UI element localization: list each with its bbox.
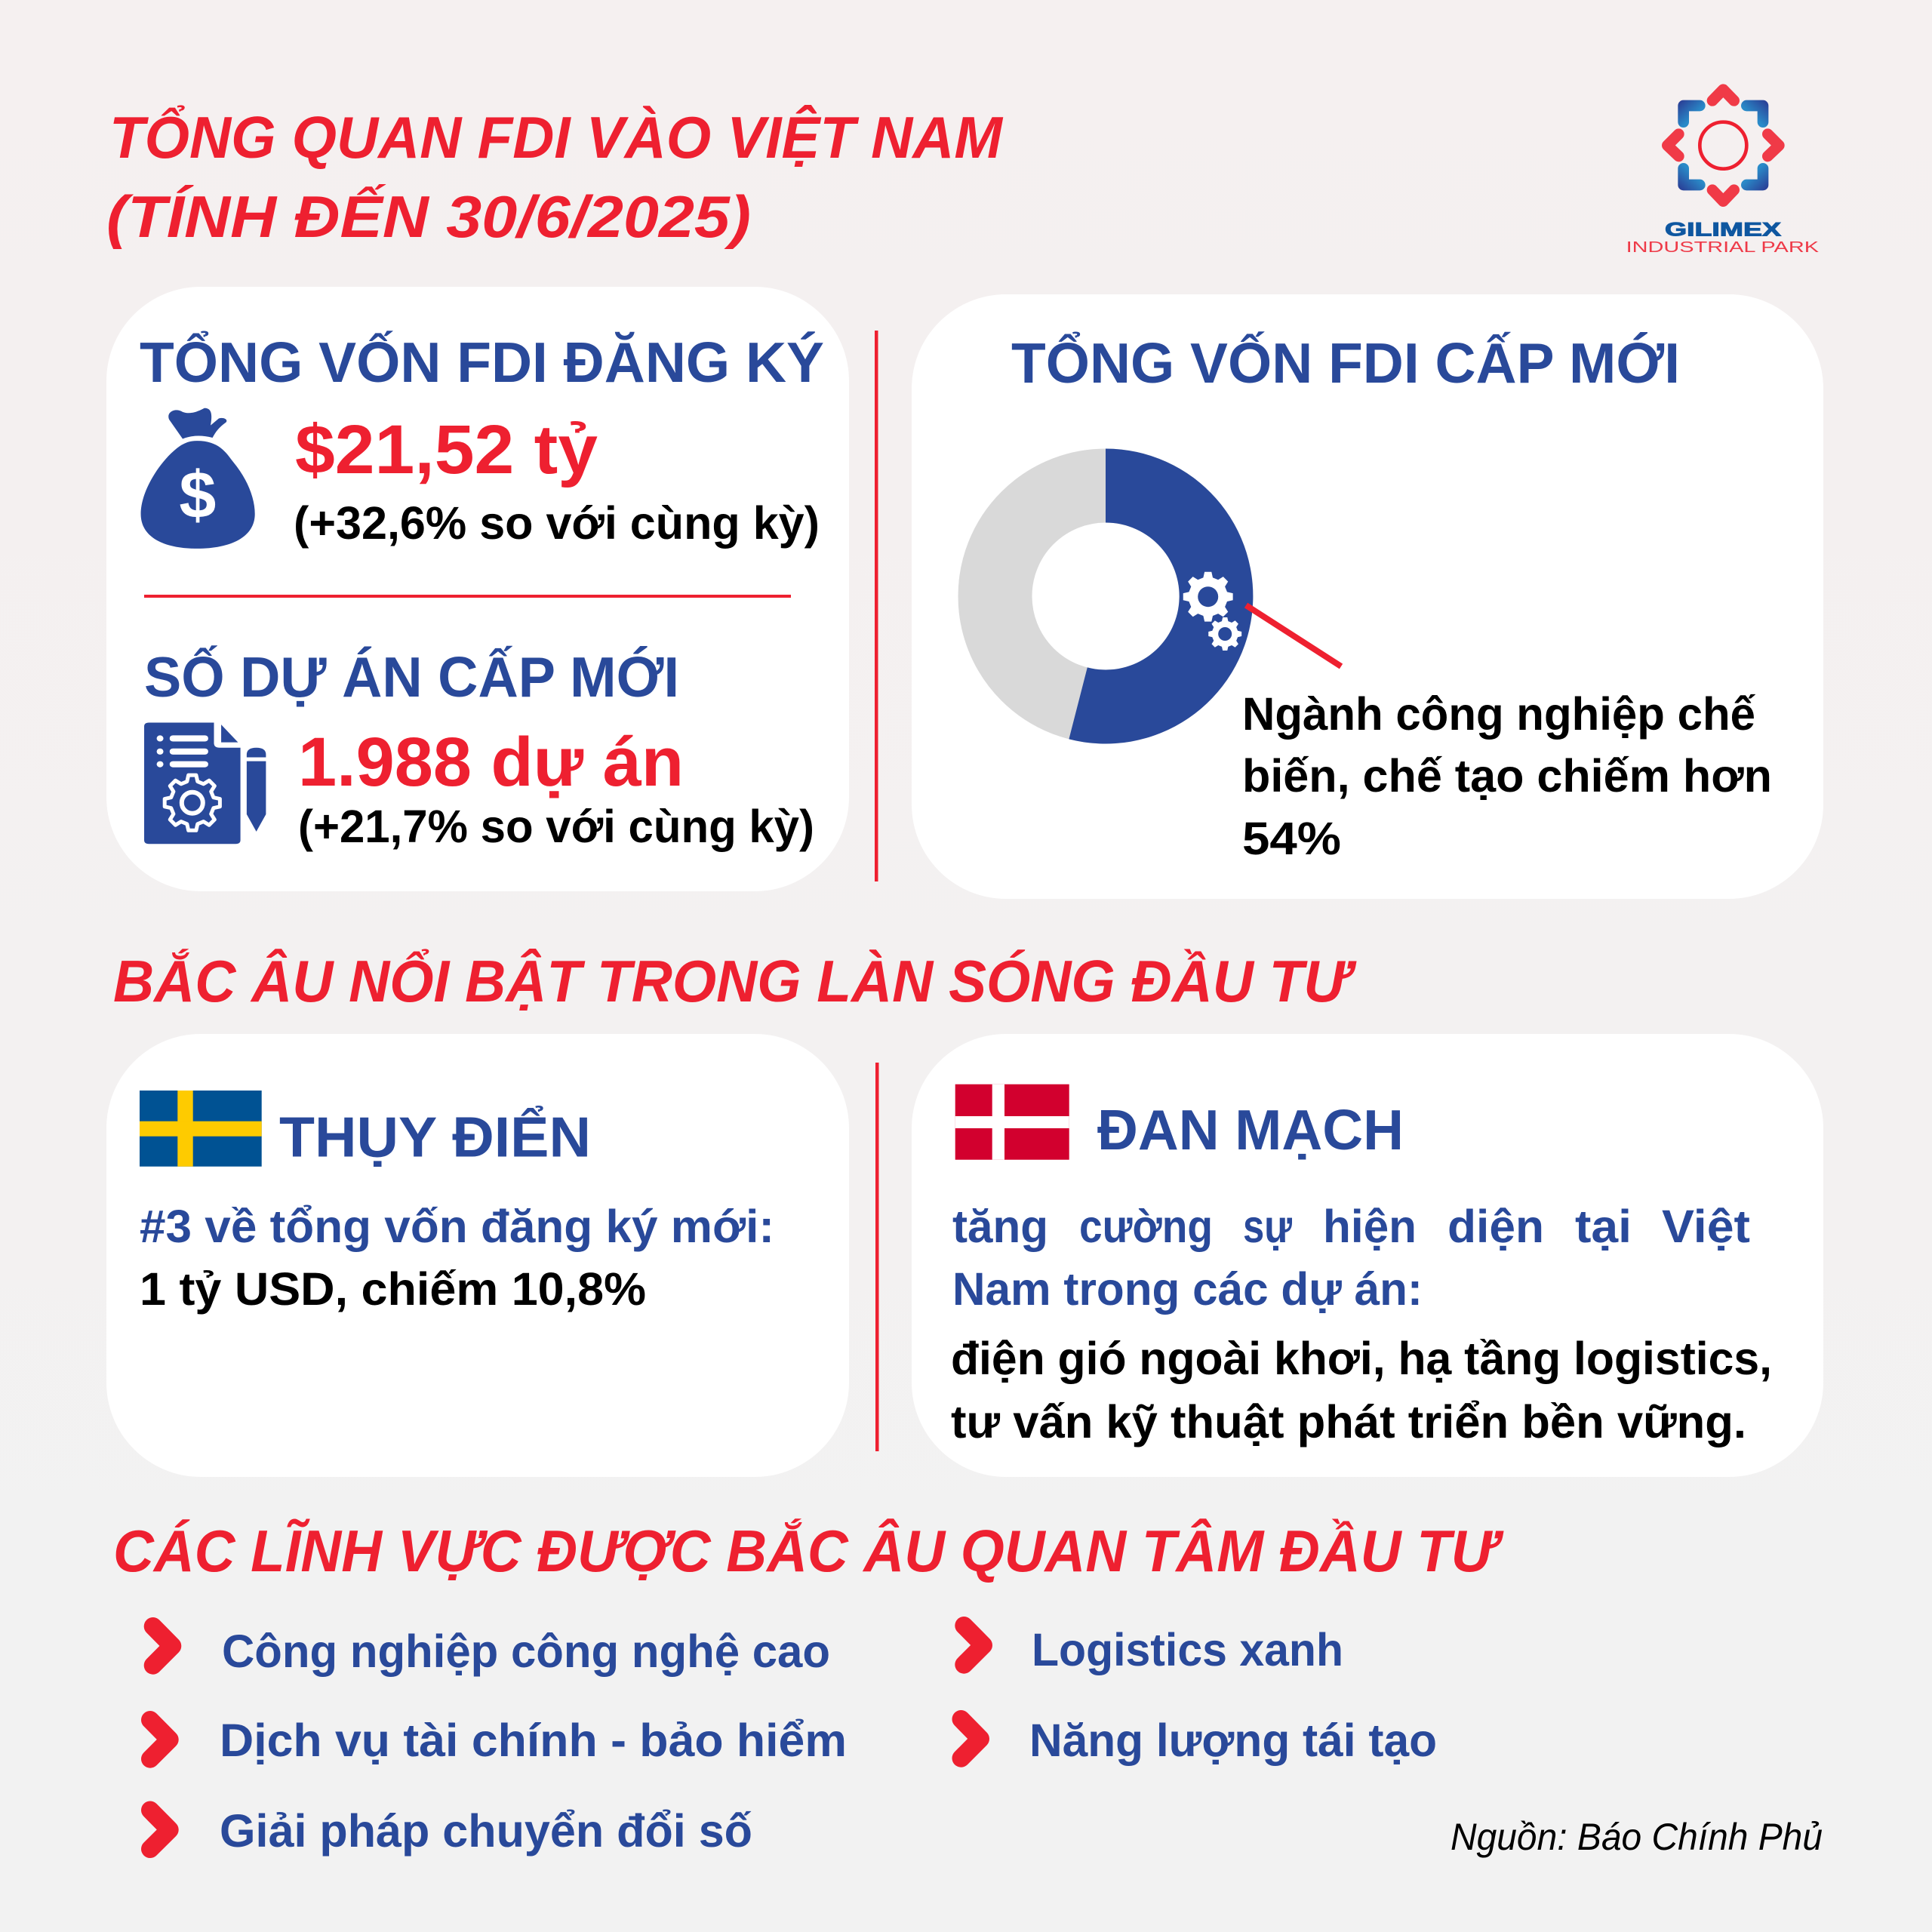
text: manufacturing callout: 54% [1242, 813, 1341, 864]
text: Denmark presence: tại [1575, 1201, 1632, 1252]
text: Denmark projects [951, 1333, 1772, 1447]
heading: sectors of Nordic interest: CÁC LĨNH VỰC ĐƯỢC BẮC ÂU QUAN TÂM ĐẦU TƯ [113, 1518, 1504, 1584]
heading: newly licensed FDI: TỔNG VỐN FDI CẤP MỚI [1011, 331, 1680, 395]
text: manufacturing callout: biến, chế tạo chiếm hơn [1242, 750, 1772, 801]
heading: Sweden: THỤY ĐIỂN [279, 1105, 591, 1168]
callout line [1246, 605, 1341, 666]
panel: Denmark [912, 1034, 1823, 1477]
heading: new projects: SỐ DỰ ÁN CẤP MỚI [144, 645, 679, 709]
text: manufacturing callout [1242, 688, 1772, 864]
panel: newly licensed FDI [912, 294, 1823, 899]
text: registered capital growth: (+32,6% so với cùng kỳ) [294, 497, 820, 549]
text: Denmark projects: tư vấn kỹ thuật phát triển bền vững. [951, 1396, 1746, 1447]
list item: renewable energy: Năng lượng tái tạo [1029, 1715, 1437, 1766]
text: Denmark presence: cường [1079, 1201, 1213, 1252]
logo: Gilimex Industrial Park: GILIMEX [1665, 220, 1781, 241]
text: Denmark presence [952, 1201, 1750, 1315]
text: new projects growth: (+21,7% so với cùng kỳ) [298, 801, 814, 852]
logo: Gilimex Industrial Park [1626, 90, 1820, 256]
heading: Denmark: ĐAN MẠCH [1097, 1098, 1404, 1161]
text: Denmark presence: Việt [1662, 1201, 1750, 1252]
logo: Gilimex Industrial Park: INDUSTRIAL PARK [1626, 239, 1820, 256]
value: registered capital: $21,52 tỷ [295, 411, 598, 488]
text: Denmark presence: diện [1447, 1201, 1544, 1252]
icon: money bag: $ [179, 457, 216, 532]
icon: document with gear and pencil [144, 723, 266, 844]
source note: Nguồn: Báo Chính Phủ [1451, 1816, 1823, 1858]
list item: digital transformation: Giải pháp chuyển đổi số [220, 1805, 752, 1857]
heading: total registered FDI: TỔNG VỐN FDI ĐĂNG KÝ [140, 331, 824, 394]
list item: green logistics: Logistics xanh [1032, 1624, 1343, 1675]
text: Sweden value: 1 tỷ USD, chiếm 10,8% [140, 1263, 646, 1315]
list item: financial services: Dịch vụ tài chính - bảo hiểm [220, 1715, 847, 1766]
text: Denmark projects: điện gió ngoài khơi, hạ tầng logistics, [951, 1333, 1772, 1384]
title [106, 104, 1004, 250]
list item: high-tech industry: Công nghiệp công nghệ cao [222, 1626, 830, 1677]
heading: Nordic investment wave: BẮC ÂU NỔI BẬT TRONG LÀN SÓNG ĐẦU TƯ [113, 948, 1357, 1014]
donut chart: manufacturing share 54% [995, 448, 1253, 743]
list: sectors [150, 1624, 1437, 1857]
icon: Sweden flag [140, 1091, 262, 1167]
icon: money bag [141, 408, 255, 549]
text: Sweden rank: #3 về tổng vốn đăng ký mới: [140, 1201, 774, 1252]
text: manufacturing callout: Ngành công nghiệp chế [1242, 688, 1755, 740]
text: Denmark presence: Nam trong các dự án: [952, 1263, 1423, 1315]
text: Denmark presence: hiện [1323, 1201, 1417, 1252]
value: new projects: 1.988 dự án [298, 724, 684, 801]
title: TỔNG QUAN FDI VÀO VIỆT NAM [109, 104, 1004, 171]
icon: Denmark flag [955, 1084, 1069, 1160]
panel: Sweden [106, 1034, 849, 1477]
icon: gears [1183, 572, 1241, 651]
text: Denmark presence: sự [1243, 1201, 1293, 1252]
panel: total registered FDI and new projects [106, 287, 849, 891]
text: Denmark presence: tăng [952, 1201, 1048, 1252]
title: (TÍNH ĐẾN 30/6/2025) [106, 183, 751, 250]
